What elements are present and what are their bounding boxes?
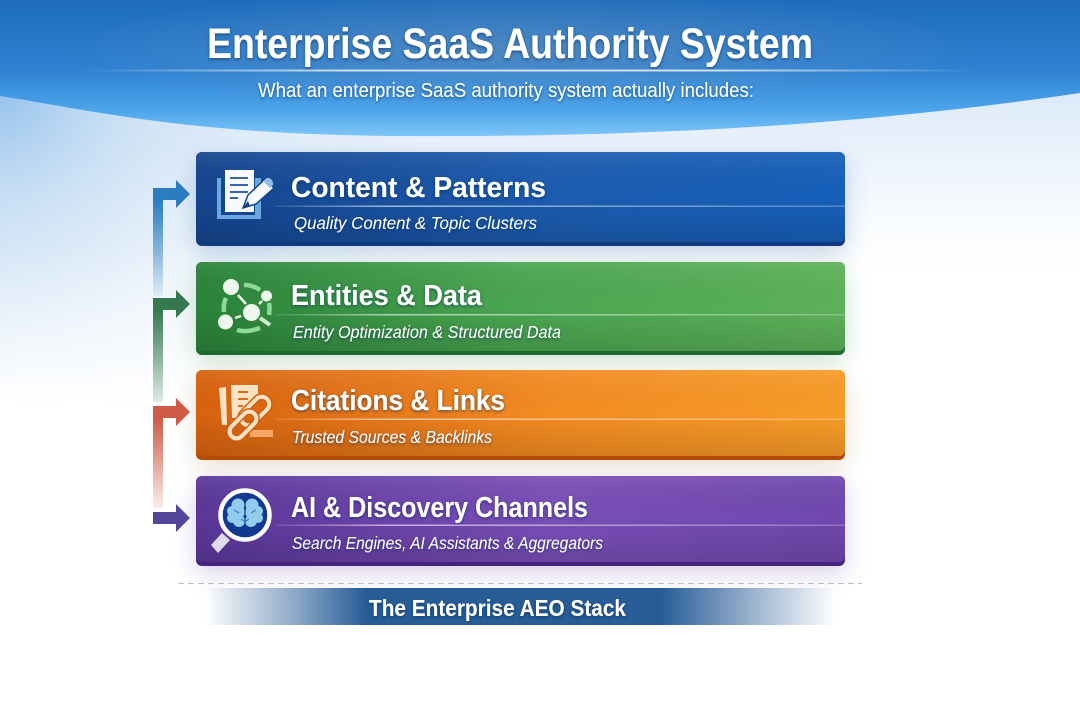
- icon: magnifier with brain: [211, 490, 270, 553]
- header banner: [0, 0, 1080, 140]
- card: Entities & Data: [196, 262, 845, 360]
- heading: AI & Discovery Channels: [291, 492, 588, 524]
- subtitle: What an enterprise SaaS authority system actually includes:: [258, 80, 754, 102]
- arrow: blue: [153, 180, 190, 296]
- heading: Content & Patterns: [291, 172, 546, 204]
- footer band: [185, 588, 855, 625]
- page background: [0, 93, 1080, 368]
- connector arrows: [153, 180, 190, 532]
- subheading: Entity Optimization & Structured Data: [293, 322, 561, 342]
- title: Enterprise SaaS Authority System: [207, 20, 813, 68]
- icon: document with pencil: [217, 170, 274, 219]
- heading: Citations & Links: [291, 385, 505, 417]
- card: Content & Patterns: [196, 152, 845, 252]
- footer label: The Enterprise AEO Stack: [369, 595, 626, 621]
- icon: entity network: [218, 279, 272, 331]
- arrow: green: [153, 290, 190, 402]
- subheading: Search Engines, AI Assistants & Aggregators: [292, 533, 603, 553]
- icon: citation document and chain link: [219, 385, 273, 441]
- heading: Entities & Data: [291, 280, 483, 312]
- arrow: red: [153, 398, 190, 508]
- subheading: Trusted Sources & Backlinks: [292, 427, 492, 447]
- arrow: purple: [153, 504, 190, 532]
- card: Citations & Links: [196, 370, 845, 466]
- subheading: Quality Content & Topic Clusters: [294, 213, 537, 233]
- card: AI & Discovery Channels: [196, 476, 845, 574]
